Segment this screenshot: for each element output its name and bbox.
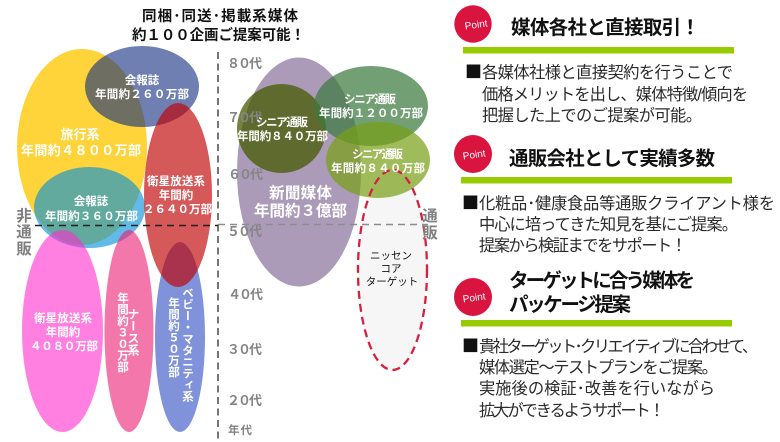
body text: point 3: 拡大ができるようサポート！ xyxy=(479,402,665,420)
icon: point badge 2 xyxy=(454,135,492,173)
age axis labels: ２０代 xyxy=(227,393,262,408)
label: non mail-order xyxy=(16,207,32,258)
icon: point badge 3 xyxy=(454,278,492,316)
text: senior 1200: シニア通販 xyxy=(344,92,396,106)
text: senior 1200: 年間約１２００万部 xyxy=(319,106,424,120)
title xyxy=(132,7,305,44)
bubble: Nissen core target fill xyxy=(358,170,427,370)
bubble: nurse xyxy=(104,230,154,432)
text: travel: 年間約４８００万部 xyxy=(21,143,141,158)
heading: point 2: 通販会社として実績多数 xyxy=(509,148,715,170)
body text: point 3 xyxy=(462,332,758,420)
body text: point 1 xyxy=(465,58,748,125)
text: senior 840 left: シニア通販 xyxy=(256,115,308,129)
label: mail-order: 通 xyxy=(422,207,438,225)
icon: point badge 3: Point xyxy=(462,291,486,306)
text: senior 840 left: 年間約８４０万部 xyxy=(237,129,328,143)
body text: point 2 xyxy=(462,189,775,255)
text: Nissen core target: ターゲット xyxy=(366,276,418,288)
body text: point 2: 提案から検証までをサポート！ xyxy=(479,237,687,255)
label: non mail-order: 非 xyxy=(16,207,32,225)
divider bar 3 xyxy=(461,320,732,326)
body text: point 2: 化粧品･健康食品等通販クライアント様を xyxy=(479,195,775,213)
text: baby and maternity xyxy=(167,287,194,403)
text: senior 1200 xyxy=(319,92,424,120)
text: member magazine 360 xyxy=(45,194,138,223)
bubble: member magazine 360 xyxy=(34,167,145,248)
bubble: travel xyxy=(17,49,147,245)
icon: point badge 2: Point xyxy=(462,148,486,163)
body text: point 3: 貴社ターゲット･クリエイティブに合わせて、 xyxy=(479,337,758,356)
text: senior 840 right: シニア通販 xyxy=(352,147,404,161)
heading: point 3: パッケージ提案 xyxy=(509,294,631,316)
bubble: satellite broadcast 4080 xyxy=(22,230,103,432)
text: Nissen core target xyxy=(366,250,418,288)
text: baby and maternity: ベビー・マタニティ系 xyxy=(181,287,194,403)
text: satellite broadcast 4080: 衛星放送系 xyxy=(34,311,92,325)
text: baby and maternity: 年間約５０万部 xyxy=(167,296,180,378)
bubble: senior mail-order 840 left xyxy=(237,84,326,173)
title: 約１００企画ご提案可能！ xyxy=(132,26,305,44)
body text: point 1: 把握した上でのご提案が可能。 xyxy=(482,107,702,125)
heading: point 3: ターゲットに合う媒体を xyxy=(509,270,695,292)
body text: point 3: 媒体選定～テストプランをご提案。 xyxy=(479,359,718,377)
label: non mail-order: 販 xyxy=(16,240,32,258)
text: nurse: 年間約３０万部 xyxy=(116,291,129,373)
body text: point 1: 価格メリットを出し、媒体特徴/傾向を xyxy=(482,86,748,104)
text: member magazine 260: 会報誌 xyxy=(125,73,160,87)
heading: point 3 xyxy=(509,270,695,316)
body text: point 3: ■ xyxy=(462,332,479,357)
body text: point 1: ■ xyxy=(465,58,482,83)
text: satellite broadcast 2640: 年間約 xyxy=(159,188,193,202)
horizontal 50s divider xyxy=(35,224,428,226)
body text: point 2: ■ xyxy=(462,189,479,214)
chart: mail-order media bubbles xyxy=(237,58,430,370)
text: senior 840 right: 年間約８４０万部 xyxy=(331,161,426,175)
text: nurse xyxy=(116,291,140,373)
divider bar 2 xyxy=(461,177,732,184)
text: nurse: ナース系 xyxy=(126,308,140,357)
age axis labels: ６０代 xyxy=(228,167,263,182)
bubble: satellite broadcast 2640 xyxy=(144,103,212,287)
bubble: member magazine 260 xyxy=(85,46,199,127)
text: satellite broadcast 2640 xyxy=(143,174,212,216)
age axis labels: ５０代 xyxy=(227,224,262,239)
panel: point 1 xyxy=(454,5,748,125)
icon: point badge 1: Point xyxy=(464,18,488,33)
text: satellite broadcast 2640: ２６４０万部 xyxy=(143,202,212,216)
text: satellite broadcast 4080: ４０８０万部 xyxy=(30,339,98,353)
text: member magazine 360: 会報誌 xyxy=(74,194,109,208)
text: travel: 旅行系 xyxy=(60,127,100,142)
divider bar 1 xyxy=(463,47,734,54)
text: newspaper: 新聞媒体 xyxy=(269,184,332,202)
text: Nissen core target: コア xyxy=(380,263,402,275)
text: satellite broadcast 4080: 年間約 xyxy=(46,325,80,339)
age axis labels: ４０代 xyxy=(228,287,263,302)
body text: point 1: 各媒体社様と直接契約を行うことで xyxy=(482,64,733,82)
heading: point 1: 媒体各社と直接取引！ xyxy=(511,16,700,39)
body text: point 3: 実施後の検証･改善を行いながら xyxy=(479,380,715,398)
label: mail-order: 販 xyxy=(422,224,438,242)
panel: point 2 xyxy=(454,135,775,255)
text: travel xyxy=(21,127,141,158)
text: member magazine 260 xyxy=(95,73,190,101)
label: mail-order xyxy=(422,207,438,242)
age axis labels: ３０代 xyxy=(227,342,262,357)
text: Nissen core target: ニッセン xyxy=(370,250,412,262)
age axis labels: 年代 xyxy=(228,423,252,437)
age axis labels: ８０代 xyxy=(227,56,262,71)
chart: non mail-order media bubbles xyxy=(17,46,212,432)
panel: point 3 xyxy=(454,270,758,420)
text: member magazine 360: 年間約３６０万部 xyxy=(45,209,138,223)
text: member magazine 260: 年間約２６０万部 xyxy=(95,87,190,101)
bubble: Nissen core target outline xyxy=(358,170,427,370)
age axis labels: ７０代 xyxy=(227,110,262,125)
vertical age axis xyxy=(217,52,219,441)
text: newspaper: 年間約３億部 xyxy=(254,201,347,220)
bubble: baby and maternity xyxy=(155,242,205,432)
bubble: senior mail-order 840 right xyxy=(326,122,430,198)
text: senior 840 right xyxy=(331,147,426,175)
bubble: senior mail-order 1200 xyxy=(314,66,428,146)
age axis labels xyxy=(227,56,263,437)
text: satellite broadcast 4080 xyxy=(30,311,98,353)
label: non mail-order: 通 xyxy=(16,223,32,241)
icon: point badge 1 xyxy=(454,5,492,43)
text: newspaper xyxy=(254,184,347,220)
text: satellite broadcast 2640: 衛星放送系 xyxy=(147,174,206,188)
title: 同梱･同送･掲載系媒体 xyxy=(142,7,298,25)
bubble: newspaper xyxy=(237,58,361,286)
text: senior 840 left xyxy=(237,115,328,143)
body text: point 2: 中心に培ってきた知見を基にご提案。 xyxy=(479,216,738,234)
